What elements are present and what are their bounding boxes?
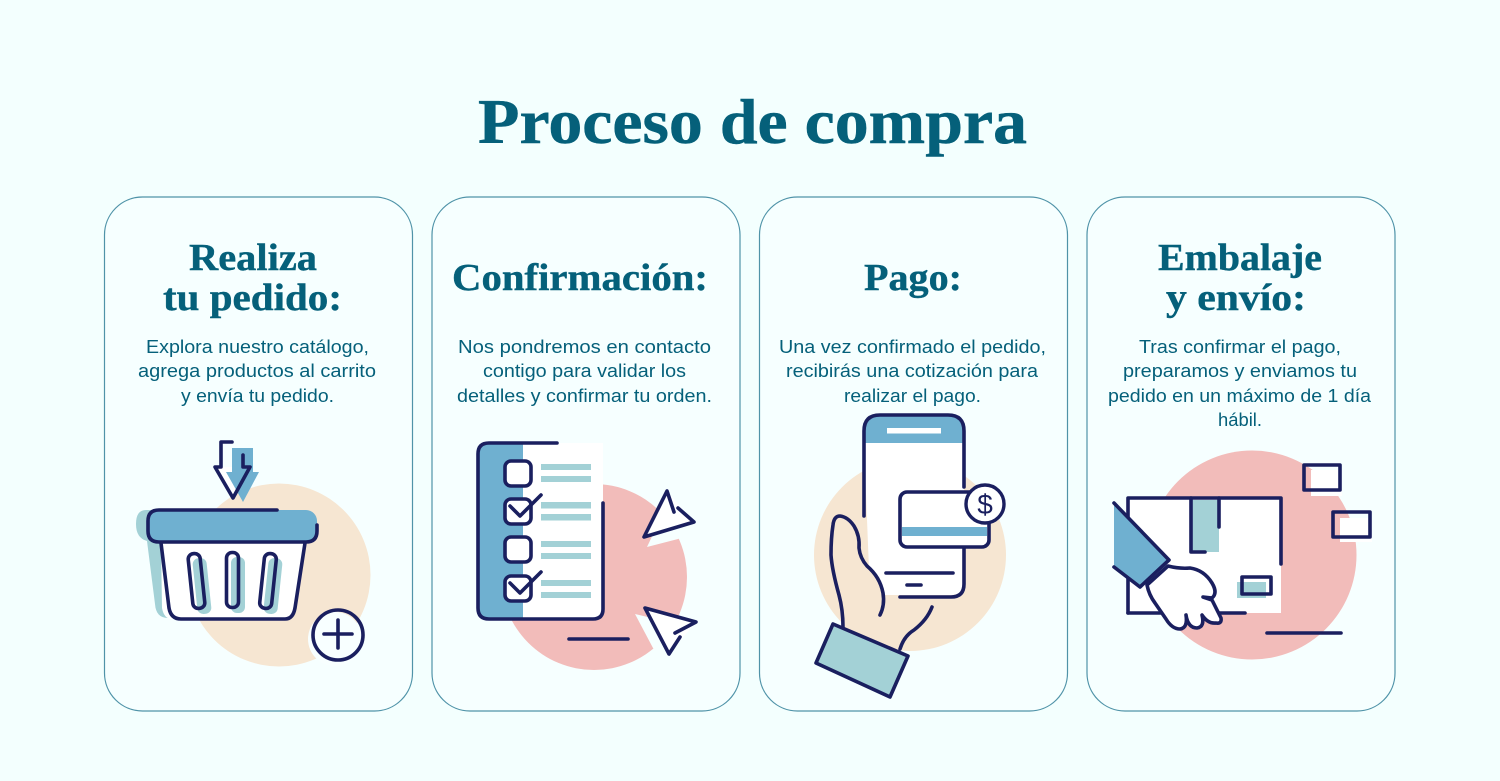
card outline (104, 197, 412, 711)
description text: detalles y confirmar tu orden. (457, 386, 712, 406)
title: Proceso de compra (478, 86, 1027, 157)
card outline (432, 197, 740, 711)
description text: Tras confirmar el pago, (1139, 337, 1341, 357)
description text (779, 337, 1046, 406)
icon: package delivery (1114, 450, 1372, 660)
panel: realiza tu pedido (104, 197, 412, 711)
icon: phone payment in hand: $ (977, 489, 993, 520)
heading: Confirmación: (452, 257, 708, 299)
description text (457, 337, 712, 406)
description text: hábil. (1218, 410, 1262, 430)
icon: phone payment in hand (814, 415, 1006, 697)
heading (1158, 237, 1322, 319)
description text: realizar el pago. (844, 386, 981, 406)
card outline (1087, 197, 1395, 711)
icon: checklist with paper planes (478, 443, 700, 670)
card outline (760, 197, 1068, 711)
heading: Pago: (864, 257, 962, 299)
heading: Embalaje (1158, 237, 1322, 279)
description text: preparamos y enviamos tu (1123, 361, 1357, 381)
panel: pago (760, 197, 1068, 711)
panel: confirmación (432, 197, 740, 711)
description text: Explora nuestro catálogo, (146, 337, 369, 357)
description text: contigo para validar los (483, 361, 686, 381)
description text: recibirás una cotización para (786, 361, 1039, 381)
description text (1108, 337, 1372, 430)
heading: Realiza (189, 237, 317, 279)
description text: Una vez confirmado el pedido, (779, 337, 1046, 357)
heading: y envío: (1166, 277, 1306, 319)
description text: pedido en un máximo de 1 día (1108, 386, 1372, 406)
description text (138, 337, 376, 406)
panel: embalaje y envío (1087, 197, 1395, 711)
heading (163, 237, 342, 319)
icon: shopping basket (136, 442, 370, 666)
heading: tu pedido: (163, 277, 342, 319)
description text: y envía tu pedido. (181, 386, 334, 406)
description text: agrega productos al carrito (138, 361, 376, 381)
description text: Nos pondremos en contacto (458, 337, 711, 357)
